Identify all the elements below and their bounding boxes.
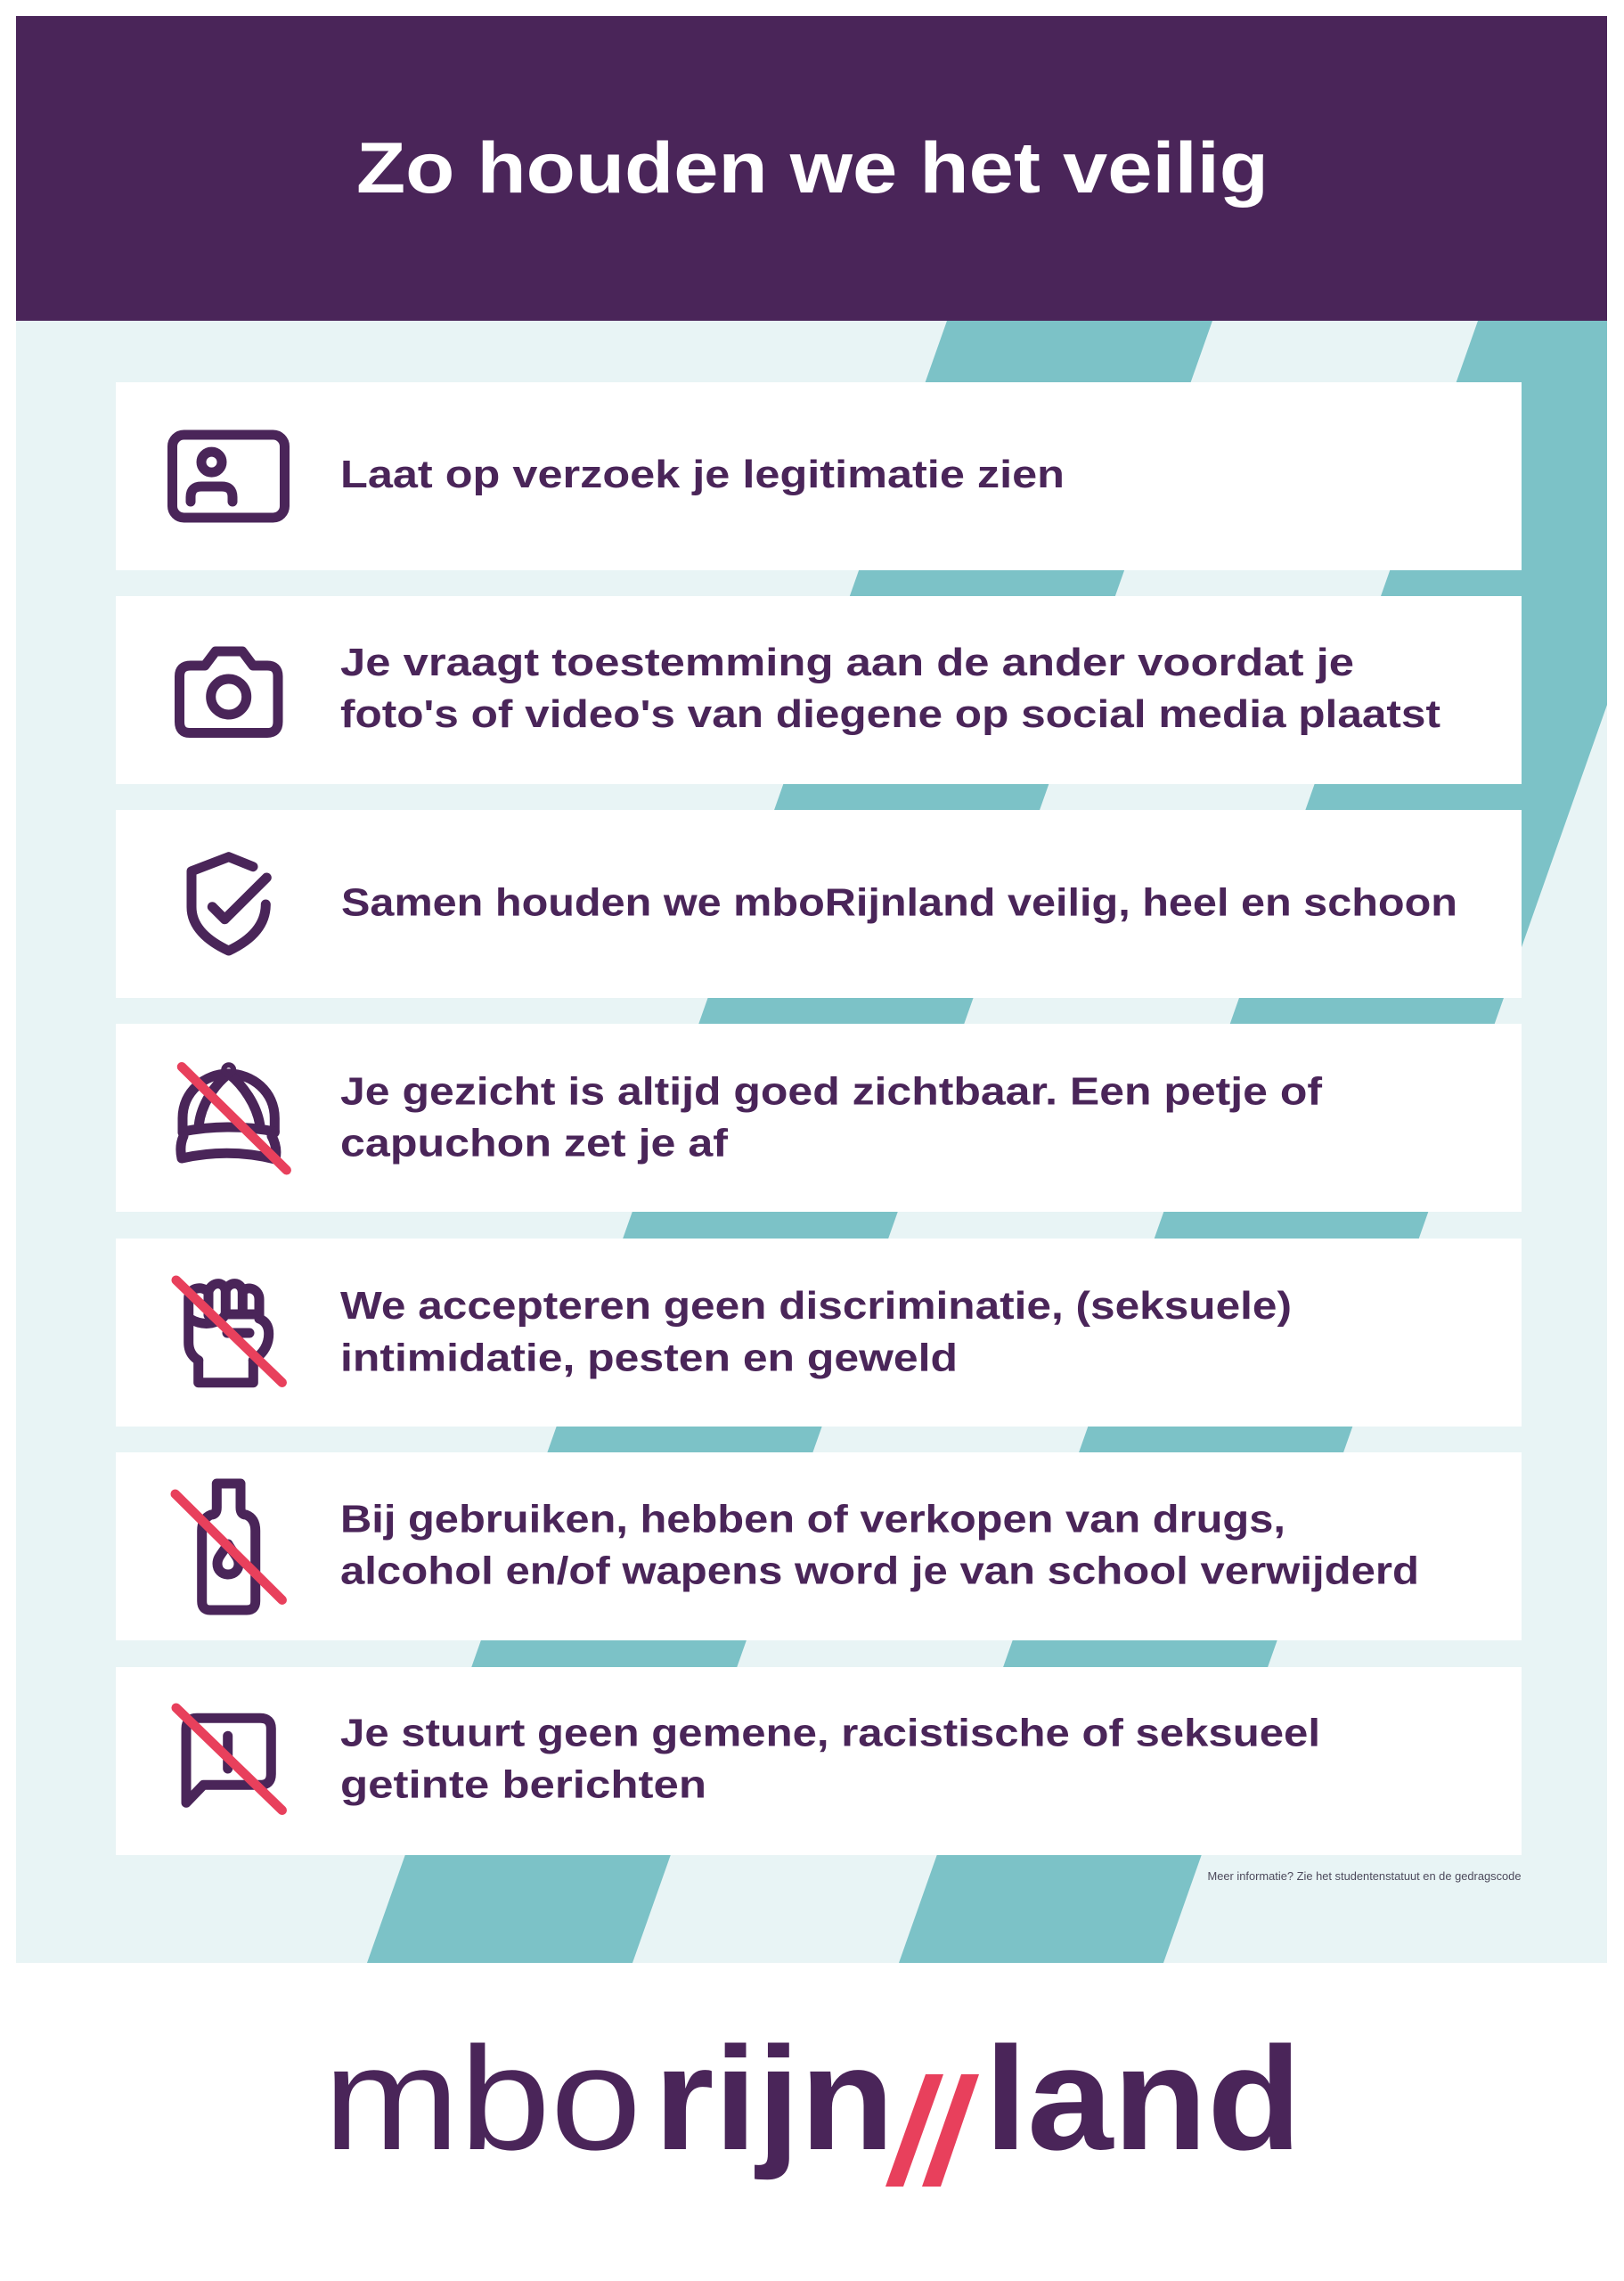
background panel [16,321,1607,1963]
panel: no mean messages rule [116,1667,1522,1855]
diagonal stripe right [899,321,1607,1963]
text: no drugs: Bij gebruiken, hebben of verkopen van drugs, [340,1499,1285,1541]
text: safe school: Samen houden we mboRijnland veilig, heel en schoon [341,882,1457,925]
footnote: Meer informatie? Zie het studentenstatuut en de gedragscode [1208,1870,1522,1883]
icon: crossed-out bottle [175,1484,282,1610]
text: face visible [340,1071,1323,1165]
diagonal stripe left [367,321,1212,1963]
panel: permission rule [116,596,1522,784]
text: no discrimination [340,1285,1292,1379]
logo: mborijnland [323,2016,1302,2187]
text: legitimation: Laat op verzoek je legitimatie zien [340,454,1065,496]
logo: mborijnland: mbo [323,2016,641,2180]
icon: crossed-out cap [181,1067,287,1170]
icon: crossed-out speech bubble [176,1708,282,1811]
text: no discrimination: We accepteren geen discriminatie, (seksuele) [340,1285,1292,1328]
text: no mean messages [340,1713,1320,1807]
text: permission: foto's of video's van diegene op social media plaatst [340,693,1440,736]
header band [16,16,1607,321]
text: face visible: Je gezicht is altijd goed zichtbaar. Een petje of [340,1071,1323,1114]
text: face visible: capuchon zet je af [340,1123,729,1165]
panel: legitimation rule [116,382,1522,570]
logo: mborijnland: land [984,2016,1302,2180]
icon: camera [180,651,278,732]
text: no mean messages: Je stuurt geen gemene, racistische of seksueel [340,1713,1320,1755]
panel: safe school rule [116,810,1522,998]
text: permission [340,642,1440,736]
text: no drugs [340,1499,1419,1593]
panel: face visible rule [116,1024,1522,1212]
text: no drugs: alcohol en/of wapens word je van school verwijderd [340,1550,1419,1593]
panel: no drugs rule [116,1452,1522,1640]
icon: shield with check [192,857,266,951]
logo: mborijnland: rijn [654,2016,894,2180]
title: Zo houden we het veilig [356,128,1269,208]
icon: ID card [173,435,285,518]
text: no mean messages: getinte berichten [340,1764,706,1807]
text: permission: Je vraagt toestemming aan de ander voordat je [340,642,1354,684]
icon: crossed-out fist [176,1280,282,1383]
text: no discrimination: intimidatie, pesten en geweld [340,1337,958,1379]
panel: no discrimination rule [116,1239,1522,1427]
